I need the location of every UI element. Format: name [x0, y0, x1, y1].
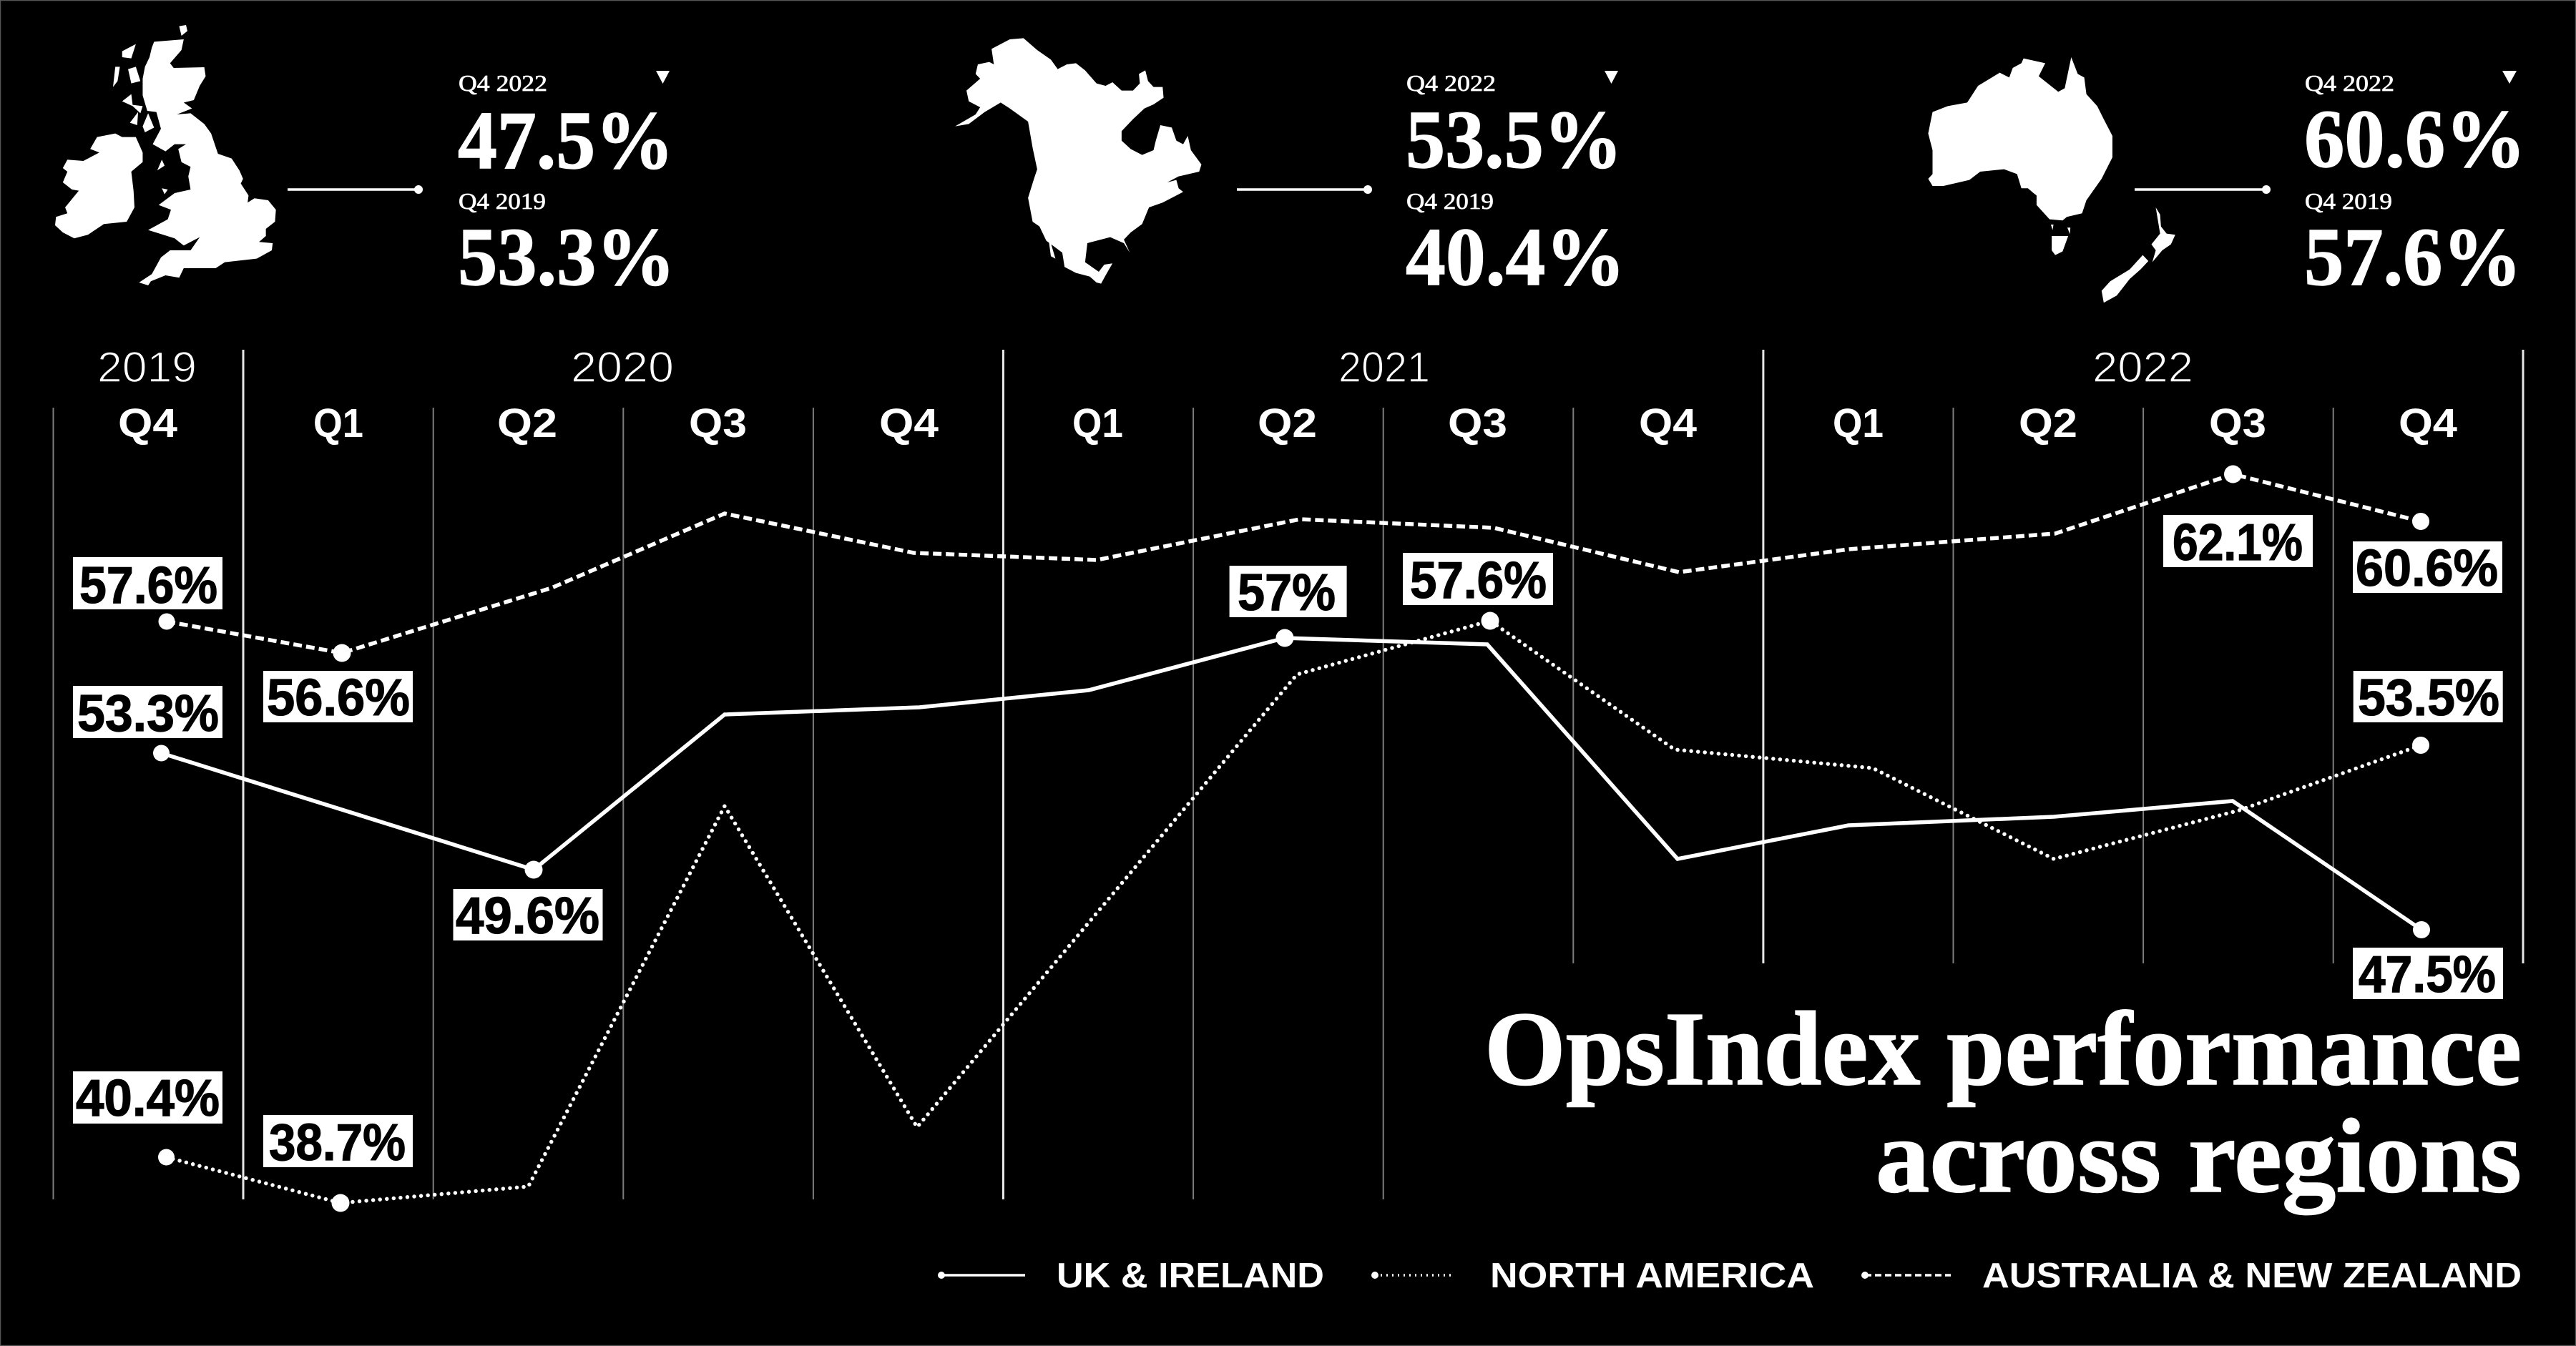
- Q4 2019 label: Q4 2019: [2305, 188, 2392, 214]
- year headings: 2021: [1338, 343, 1430, 391]
- data label: 40.4%: 40.4%: [76, 1070, 220, 1127]
- connector line: [1237, 185, 1372, 194]
- legend: North America: [1371, 1257, 1814, 1295]
- quarter headings: Q2: [2019, 401, 2077, 446]
- icon: map of Australia and New Zealand: [1928, 57, 2175, 303]
- legend: North America: NORTH AMERICA: [1490, 1257, 1814, 1295]
- data label: 53.3%: 53.3%: [77, 685, 219, 742]
- quarter headings: Q1: [1072, 401, 1123, 446]
- panel: UK and Ireland stats: [55, 25, 675, 303]
- title: across regions: [1876, 1098, 2522, 1215]
- Q4 2019 value: 57.6%: [2304, 212, 2522, 303]
- quarter headings: Q4: [1639, 401, 1697, 446]
- icon: map of UK and Ireland: [55, 25, 276, 285]
- line chart: [53, 343, 2523, 1212]
- series: Australia and New Zealand (dashed): [159, 465, 2429, 662]
- connector line: [288, 185, 423, 194]
- data label: 62.1%: 62.1%: [2173, 514, 2303, 571]
- icon: down triangle: [2502, 71, 2517, 84]
- panel: Australia and New Zealand stats: [1928, 57, 2526, 303]
- quarter headings: [118, 401, 2457, 446]
- icon: down triangle: [656, 71, 670, 84]
- connector line: [2135, 185, 2271, 194]
- Q4 2022 value: 47.5%: [458, 95, 674, 187]
- year headings: 2022: [2092, 343, 2193, 391]
- year headings: [97, 343, 2193, 391]
- data label: 60.6%: 60.6%: [2356, 540, 2498, 597]
- quarter headings: Q3: [2209, 401, 2266, 446]
- Q4 2019 label: Q4 2019: [459, 188, 546, 214]
- quarter headings: Q1: [1833, 401, 1884, 446]
- icon: map of North America: [955, 38, 1201, 284]
- data label: 57.6%: 57.6%: [79, 557, 217, 614]
- quarter headings: Q4: [118, 401, 177, 446]
- Q4 2019 value: 40.4%: [1406, 212, 1625, 303]
- data label: 47.5%: 47.5%: [2359, 946, 2496, 1003]
- data label: 57%: 57%: [1238, 564, 1336, 622]
- legend: UK and Ireland: [938, 1257, 1324, 1295]
- Q4 2022 label: Q4 2022: [459, 70, 547, 96]
- data label: 56.6%: 56.6%: [267, 669, 410, 727]
- quarter headings: Q3: [1448, 401, 1507, 446]
- Q4 2022 label: Q4 2022: [1406, 70, 1496, 96]
- year headings: 2020: [571, 343, 674, 391]
- quarter headings: Q4: [2399, 401, 2457, 446]
- year headings: 2019: [97, 343, 197, 391]
- Q4 2019 value: 53.3%: [458, 212, 675, 303]
- data label: 57.6% Q3 2021: 57.6%: [1410, 552, 1547, 609]
- Q4 2019 label: Q4 2019: [1406, 188, 1494, 214]
- legend: Australia and New Zealand: AUSTRALIA & NEW ZEALAND: [1982, 1257, 2522, 1295]
- title: OpsIndex performance: [1484, 991, 2522, 1108]
- quarter headings: Q4: [879, 401, 939, 446]
- data label: 53.5%: 53.5%: [2358, 669, 2499, 727]
- title: [1484, 991, 2522, 1215]
- quarter headings: Q1: [313, 401, 363, 446]
- panel: North America stats: [955, 38, 1625, 303]
- icon: down triangle: [1605, 71, 1618, 84]
- quarter headings: Q2: [1258, 401, 1317, 446]
- series: UK and Ireland (solid): [153, 629, 2430, 938]
- series: North America (dotted): [158, 612, 2429, 1212]
- legend: [938, 1257, 2522, 1295]
- legend: UK and Ireland: UK & IRELAND: [1057, 1257, 1324, 1295]
- data label: 38.7%: 38.7%: [269, 1114, 406, 1171]
- data label: 49.6%: 49.6%: [456, 888, 599, 945]
- Q4 2022 value: 60.6%: [2304, 94, 2526, 185]
- quarter headings: Q2: [497, 401, 557, 446]
- Q4 2022 label: Q4 2022: [2305, 70, 2394, 96]
- Q4 2022 value: 53.5%: [1406, 94, 1622, 186]
- quarter headings: Q3: [689, 401, 747, 446]
